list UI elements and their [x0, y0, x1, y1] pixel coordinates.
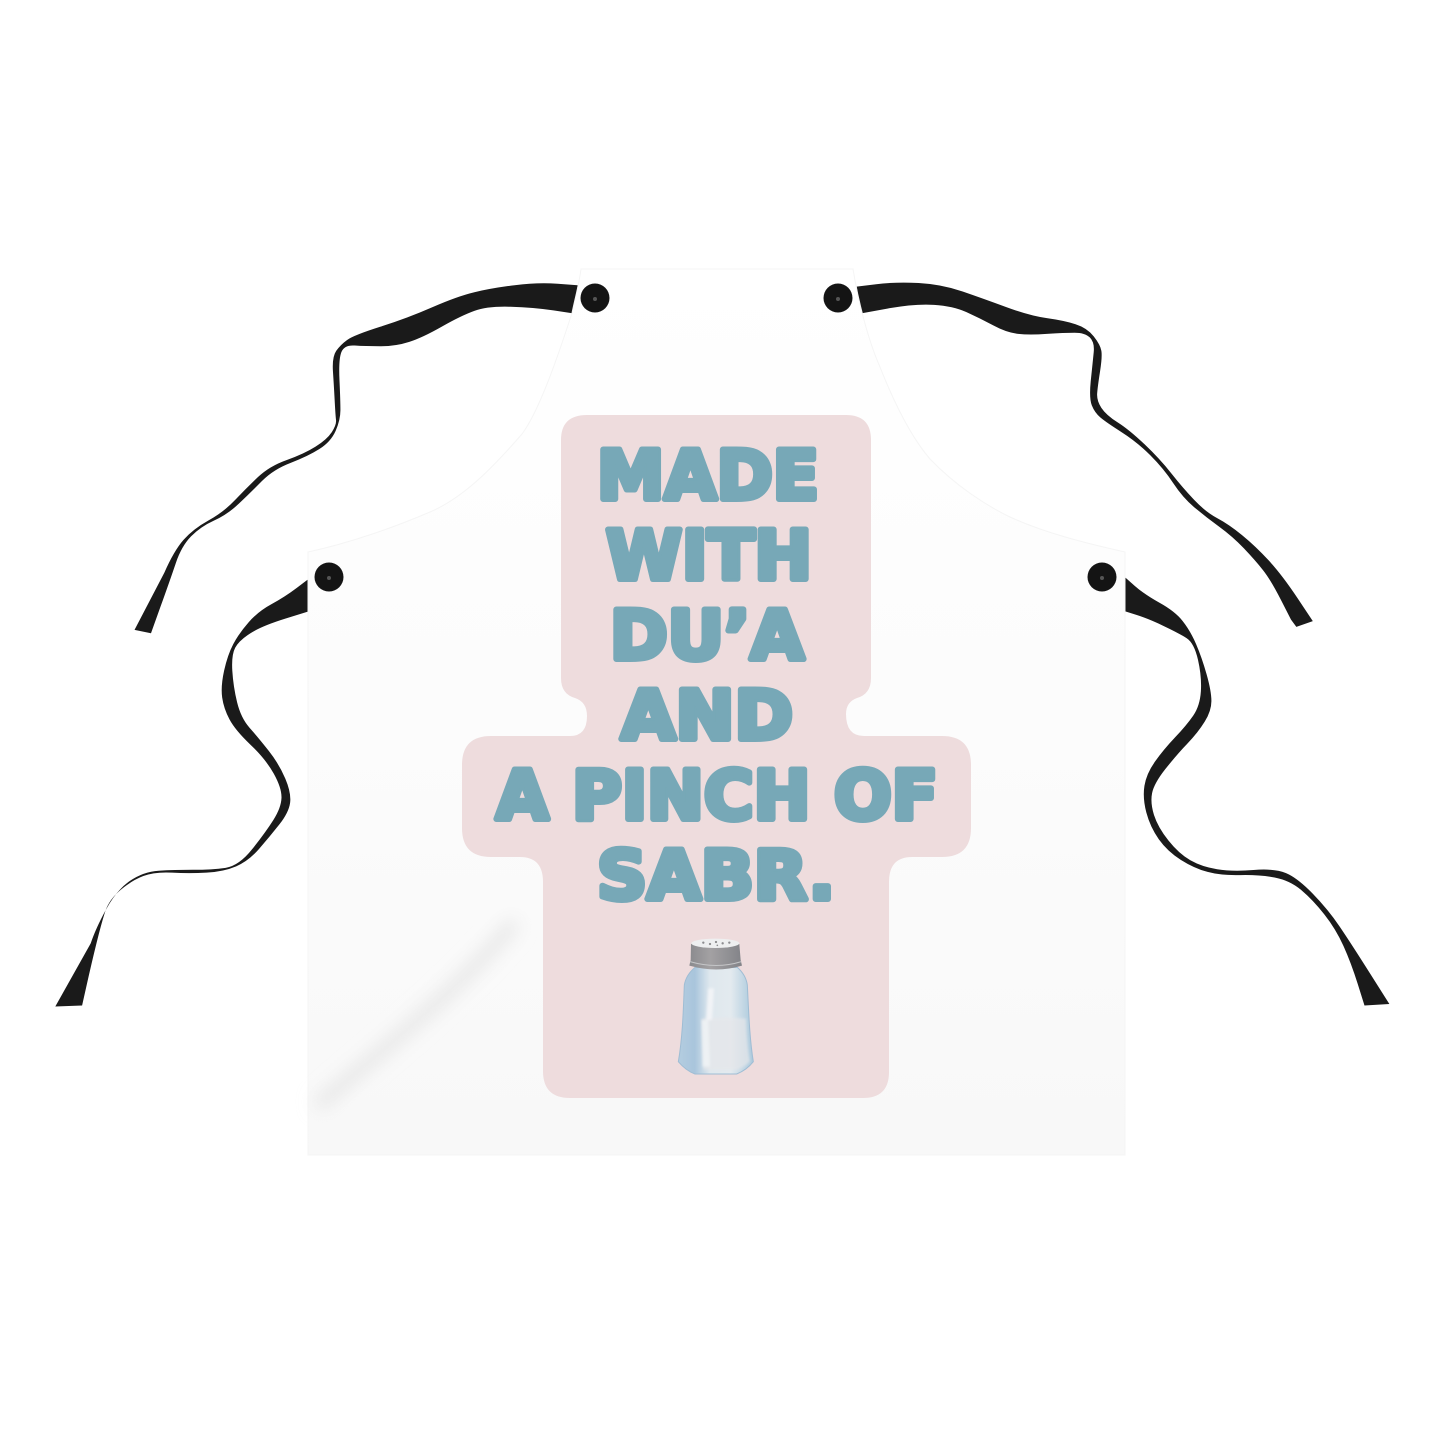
shaker cap top: [691, 939, 739, 948]
shaker glass body: [678, 967, 753, 1074]
slogan line: AND: AND: [621, 677, 793, 756]
apron fold shadow: lower left: [318, 922, 515, 1106]
button: side right: [1088, 562, 1116, 592]
icon: salt shaker: [678, 939, 753, 1074]
strap: lower right: [1125, 577, 1389, 1005]
strap: top right: [857, 283, 1313, 627]
strap: top left: [135, 283, 578, 633]
shaker salt fill: [702, 1018, 750, 1070]
shaker glass highlights: [702, 988, 714, 1067]
button: side left: [314, 562, 344, 592]
pink backing panel: [462, 415, 971, 1098]
strap: lower left: [55, 579, 309, 1006]
apron body: [308, 269, 1125, 1155]
slogan line: DU'A: DU’A: [610, 597, 804, 676]
slogan line: A PINCH OF: A PINCH OF: [496, 757, 938, 836]
shaker cap rim: [690, 962, 741, 965]
slogan line: SABR.: SABR.: [597, 837, 835, 916]
shaker cap holes: [702, 941, 730, 946]
slogan text: [496, 437, 938, 916]
slogan line: MADE: MADE: [597, 437, 819, 516]
button: top right: [824, 284, 852, 312]
shaker metal cap: [689, 940, 742, 969]
button: top left: [580, 284, 610, 312]
slogan line: WITH: WITH: [606, 517, 812, 596]
